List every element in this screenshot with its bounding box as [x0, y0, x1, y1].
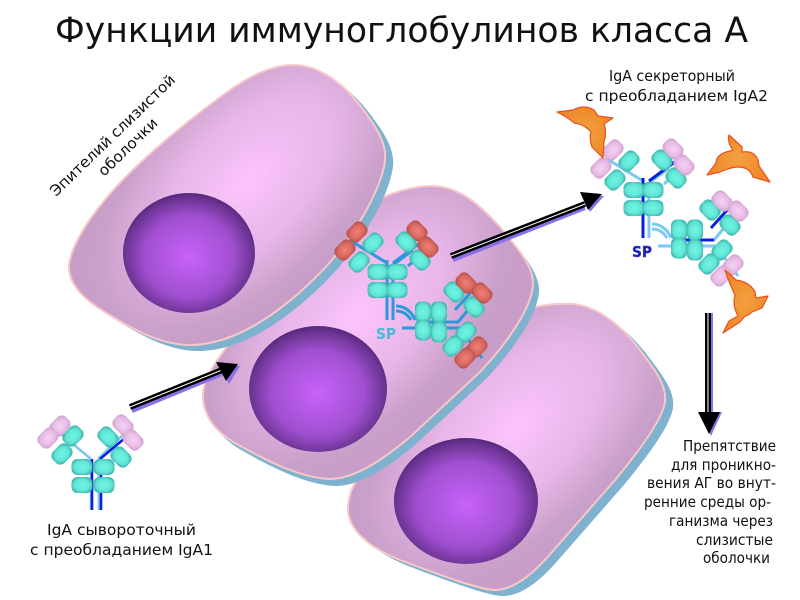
antibody: serum IgA monomer — [35, 412, 146, 510]
label: serum IgA: с преобладанием IgA1 — [30, 541, 213, 559]
caption: barrier to antigen penetration: слизистые — [696, 531, 773, 549]
caption: barrier to antigen penetration: для проникно- — [671, 456, 776, 474]
antibody: secretory IgA dimer with SP — [588, 136, 751, 289]
label: SP in cell: SP — [376, 325, 396, 343]
caption: barrier to antigen penetration — [644, 437, 776, 567]
antigen: bottom right — [723, 270, 768, 333]
label: secretory IgA: IgA секреторный — [609, 67, 735, 85]
nucleus: middle cell — [249, 326, 387, 452]
arrow: secretory IgA down to caption — [698, 313, 722, 436]
label: epithelium of mucosa: оболочки — [94, 114, 161, 180]
caption: barrier to antigen penetration: ганизма через — [669, 512, 773, 530]
label: secretory IgA: с преобладанием IgA2 — [585, 87, 768, 105]
label: serum IgA — [30, 521, 213, 559]
label: epithelium of mucosa: Эпителий слизистой — [46, 71, 179, 200]
label: SP secretory: SP — [632, 243, 652, 261]
caption: barrier to antigen penetration: вения АГ во внут- — [647, 474, 776, 492]
label: secretory IgA — [585, 67, 768, 105]
antigen: top right — [707, 135, 770, 182]
cell: upper left epithelial cell — [69, 65, 393, 351]
antibody: IgA dimer inside cell with SP — [332, 218, 495, 371]
caption: barrier to antigen penetration: ренние среды ор- — [644, 493, 771, 511]
nucleus: lower right cell — [394, 438, 538, 564]
arrow: cell to secretory IgA — [451, 192, 604, 260]
label: serum IgA: IgA сывороточный — [47, 521, 196, 539]
antigen: top left — [557, 107, 613, 158]
arrow: serum IgA into cell — [130, 362, 240, 411]
nucleus: upper left cell — [123, 193, 255, 313]
cell: lower right epithelial cell — [348, 304, 673, 596]
cell: middle epithelial cell — [203, 186, 539, 486]
caption: barrier to antigen penetration: оболочки — [703, 549, 770, 567]
title: Функции иммуноглобулинов класса А — [55, 11, 748, 51]
caption: barrier to antigen penetration: Препятствие — [683, 437, 776, 455]
